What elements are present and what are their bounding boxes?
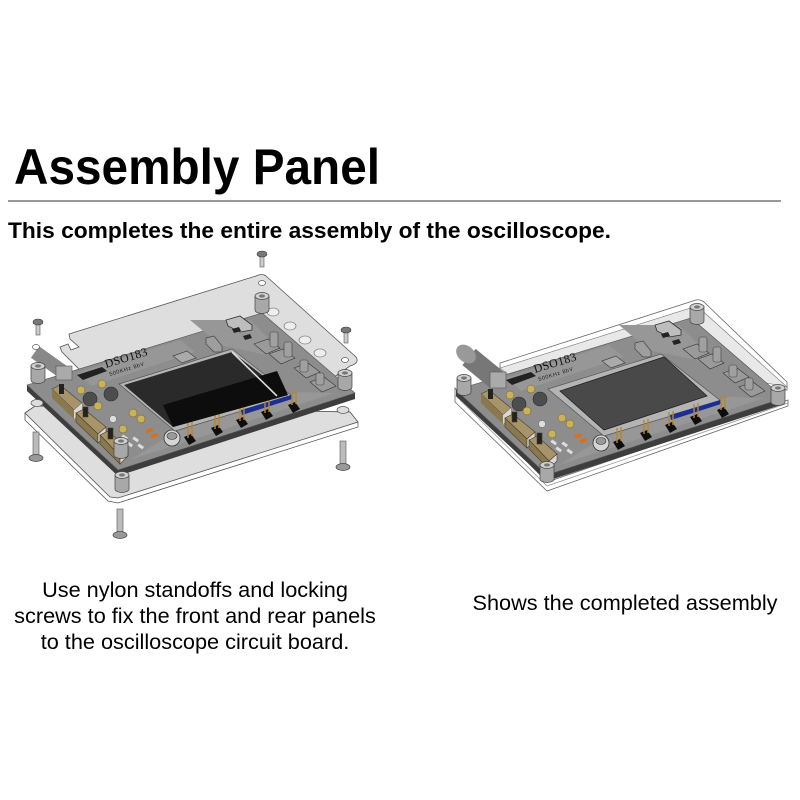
top acrylic panel — [60, 274, 357, 380]
front acrylic panel — [455, 388, 788, 491]
standoffs — [31, 292, 352, 492]
completed assembly diagram — [452, 300, 788, 491]
circuit board — [27, 313, 355, 476]
left caption: to the oscilloscope circuit board. — [41, 629, 349, 654]
exploded assembly diagram — [25, 251, 358, 538]
button holes in top panel — [267, 308, 326, 357]
left caption: Use nylon standoffs and locking — [42, 577, 348, 602]
bottom acrylic panel — [25, 406, 358, 503]
locking screws — [33, 251, 351, 343]
long bottom screws — [29, 432, 350, 538]
right caption: Shows the completed assembly — [473, 590, 778, 615]
BNC connector — [452, 341, 506, 388]
left caption — [14, 577, 376, 654]
left caption: screws to fix the front and rear panels — [14, 603, 376, 628]
rear acrylic panel — [500, 300, 787, 390]
subheading: This completes the entire assembly of the oscilloscope. — [8, 218, 611, 243]
LCD screen, displayed with panel reflection — [124, 352, 288, 427]
title: Assembly Panel — [14, 139, 380, 195]
LCD screen, grey — [560, 357, 707, 430]
spacer rings — [31, 280, 349, 414]
circuit board — [456, 318, 784, 481]
BNC connector — [35, 352, 72, 380]
standoffs — [457, 304, 785, 482]
